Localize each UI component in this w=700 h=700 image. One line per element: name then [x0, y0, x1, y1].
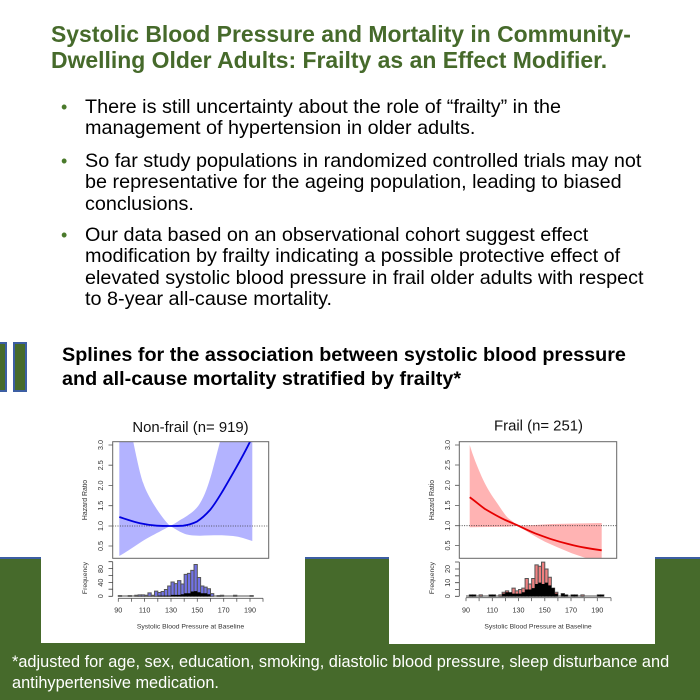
- histogram y axis: [108, 562, 113, 596]
- hazard ratio curve: [119, 442, 250, 526]
- green footer band: [0, 557, 700, 700]
- chart: non-frail splines and histogram: [82, 420, 618, 630]
- chart title: Frail (n= 251): [494, 418, 583, 434]
- x tick labels: 190: [244, 606, 256, 614]
- bullet 2: conclusions.: [85, 193, 194, 215]
- x tick labels: 190: [591, 606, 603, 614]
- x tick labels: 110: [487, 606, 498, 614]
- reference line: [459, 525, 617, 527]
- histogram y axis: [455, 562, 459, 596]
- x axis: [118, 598, 263, 602]
- histogram y tick labels: [443, 565, 452, 598]
- y axis label: Hazard Ratio: [429, 480, 436, 520]
- histogram y tick labels: 80: [96, 565, 105, 573]
- bullet 3: elevated systolic blood pressure in frail older adults with respect: [85, 267, 644, 289]
- bullet 1: There is still uncertainty about the role of “frailty” in the: [85, 96, 561, 118]
- histogram y tick labels: 0: [96, 594, 105, 598]
- y tick labels: 0.5: [443, 540, 452, 550]
- y tick labels: 1.0: [443, 521, 452, 531]
- bullet 2: •: [61, 151, 67, 171]
- bullet 2: So far study populations in randomized controlled trials may not: [85, 150, 641, 172]
- y tick labels: [443, 440, 452, 550]
- histogram y tick labels: [96, 565, 105, 598]
- y axis ticks: [108, 445, 113, 546]
- x tick labels: [114, 606, 256, 614]
- confidence band: [119, 442, 252, 556]
- x tick labels: 170: [218, 606, 230, 614]
- histogram y tick labels: 10: [443, 579, 452, 587]
- x tick labels: 90: [114, 606, 122, 614]
- x tick labels: 170: [565, 606, 577, 614]
- bullet list: [61, 96, 644, 310]
- footnote: [12, 653, 669, 692]
- x tick labels: 150: [191, 606, 203, 614]
- y tick labels: [96, 440, 105, 551]
- non-frail chart: [82, 420, 269, 631]
- y axis label: Hazard Ratio: [82, 480, 89, 520]
- reference line: [113, 525, 269, 527]
- y tick labels: 0.5: [96, 541, 105, 551]
- bullet 3: •: [61, 225, 67, 245]
- footnote: *adjusted for age, sex, education, smoking, diastolic blood pressure, sleep disturbance and: [12, 653, 669, 671]
- y tick labels: 2.5: [443, 460, 452, 470]
- chart title: Non-frail (n= 919): [132, 420, 249, 436]
- white chart panel right: [389, 550, 655, 644]
- frail chart: [429, 418, 617, 631]
- histogram: [118, 565, 253, 596]
- title: Dwelling Older Adults: Frailty as an Effect Modifier.: [51, 47, 607, 73]
- x tick labels: 90: [462, 606, 470, 614]
- section heading: [62, 344, 626, 390]
- x tick labels: 150: [539, 606, 551, 614]
- histogram: [469, 562, 604, 596]
- y tick labels: 3.0: [443, 440, 452, 450]
- y tick labels: 2.0: [96, 480, 105, 490]
- x tick labels: [462, 606, 603, 614]
- bullet 1: [61, 96, 561, 139]
- y tick labels: 1.0: [96, 521, 105, 531]
- bullet 3: modification by frailty indicating a possible protective effect of: [85, 245, 620, 267]
- x axis label: Systolic Blood Pressure at Baseline: [484, 624, 592, 631]
- histogram baseline: [466, 595, 603, 597]
- hazard ratio curve: [470, 497, 602, 550]
- title: [51, 21, 631, 73]
- bullet 1: management of hypertension in older adults.: [85, 117, 475, 139]
- histogram y tick labels: 0: [443, 594, 452, 598]
- plot frame: [113, 442, 269, 558]
- x axis label: Systolic Blood Pressure at Baseline: [137, 624, 244, 631]
- y tick labels: 2.0: [443, 480, 452, 490]
- histogram y label: Frequency: [429, 561, 436, 594]
- x tick labels: 130: [165, 606, 177, 614]
- decorative section marker bars: [0, 342, 27, 392]
- x axis: [466, 598, 611, 601]
- histogram y tick labels: 40: [96, 579, 105, 587]
- y tick labels: 1.5: [96, 501, 105, 511]
- histogram baseline: [118, 595, 253, 597]
- x tick labels: 130: [512, 606, 524, 614]
- plot frame: [459, 442, 617, 558]
- bullet 3: [61, 224, 644, 310]
- white chart panel left: [41, 550, 305, 643]
- y axis ticks: [455, 445, 459, 546]
- bullet 1: •: [61, 97, 67, 117]
- x tick labels: 110: [139, 606, 150, 614]
- footnote: antihypertensive medication.: [12, 674, 219, 692]
- bullet 3: to 8-year all-cause mortality.: [85, 288, 332, 310]
- section heading: and all-cause mortality stratified by frailty*: [62, 368, 461, 390]
- confidence band: [470, 445, 602, 560]
- y tick labels: 1.5: [443, 500, 452, 510]
- y tick labels: 3.0: [96, 440, 105, 450]
- histogram y tick labels: 20: [443, 565, 452, 573]
- y tick labels: 2.5: [96, 460, 105, 470]
- bullet 3: Our data based on an observational cohort suggest effect: [85, 224, 588, 246]
- histogram y label: Frequency: [82, 561, 89, 594]
- bullet 2: [61, 150, 642, 215]
- title: Systolic Blood Pressure and Mortality in Community-: [51, 21, 631, 47]
- section heading: Splines for the association between systolic blood pressure: [62, 344, 626, 366]
- bullet 2: be representative for the ageing population, leading to biased: [85, 171, 622, 193]
